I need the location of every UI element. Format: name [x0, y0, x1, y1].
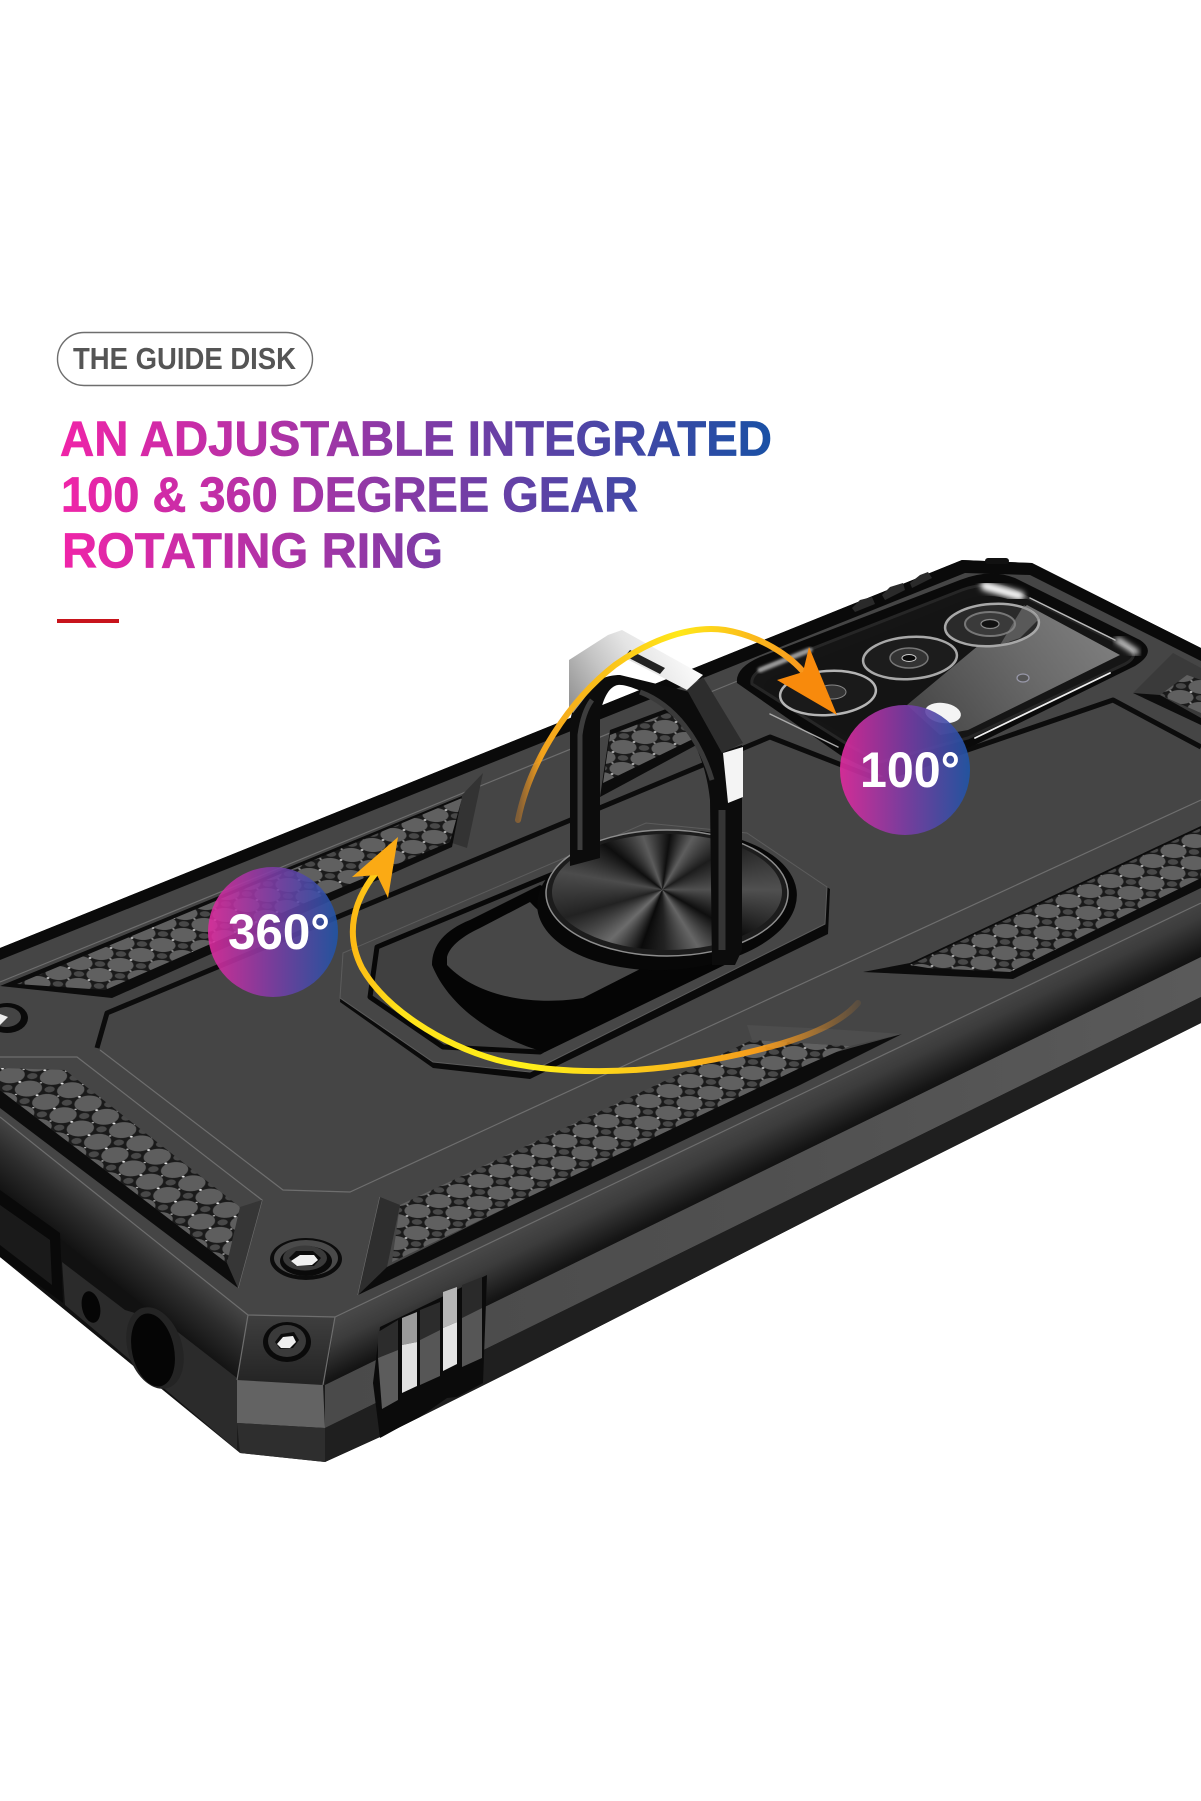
badge: the guide disk [58, 332, 312, 386]
back face [0, 573, 1201, 1317]
honeycomb panel: top left [0, 773, 483, 998]
side buttons [852, 558, 1009, 612]
arrow: 360 degree rotation [352, 837, 858, 1071]
rim glints [760, 586, 1136, 747]
top black edge [0, 560, 1201, 962]
honeycomb panel: bottom [358, 1025, 902, 1295]
octagon recess [370, 838, 790, 1052]
disk [552, 834, 782, 950]
side groove left [0, 1117, 248, 1380]
lens 3 [944, 601, 1040, 649]
lower corner [237, 1423, 325, 1462]
flash [924, 701, 962, 725]
grey side strip [325, 957, 1201, 1428]
badge: the guide disk: THE GUIDE DISK [73, 341, 297, 376]
corner bevel [237, 1315, 335, 1385]
corner plate [237, 1380, 325, 1428]
phone case [0, 558, 1201, 1462]
screw: lower corner [263, 1322, 311, 1362]
octagon plate [340, 823, 827, 1072]
honeycomb panel: top right [1133, 653, 1201, 725]
slider shadow body [432, 885, 735, 1052]
case silhouette [0, 560, 1201, 1462]
camera light glass [907, 605, 1120, 735]
side clip bars [373, 1275, 487, 1438]
screw: left edge [0, 1003, 28, 1033]
callout: 360 degrees: 360° [228, 904, 330, 960]
lower band [325, 997, 1201, 1462]
octagon plate shadow [340, 838, 830, 1079]
arrow: 100 degree rotation [518, 629, 837, 820]
camera black glass [764, 596, 1120, 752]
callout: 100 degrees [840, 705, 970, 835]
microphone dot [1017, 674, 1029, 682]
ring mount [340, 630, 830, 1079]
camera rim [752, 585, 1133, 762]
hinge slot [625, 650, 665, 674]
slider inner [447, 902, 658, 1001]
title [60, 412, 772, 578]
callout: 360 degrees [208, 867, 338, 997]
honeycomb panel: near ring [600, 700, 715, 797]
hinge side [687, 677, 743, 753]
camera outer frame [737, 573, 1148, 777]
honeycomb panel: right [863, 826, 1201, 979]
camera module [737, 573, 1148, 777]
light contour lines [0, 680, 1201, 1385]
end side with ports [0, 1190, 237, 1450]
ring handle [570, 675, 742, 965]
honeycomb panel: bottom left [0, 1068, 262, 1288]
hinge chrome bar [723, 747, 743, 803]
title: AN ADJUSTABLE INTEGRATED [60, 412, 772, 466]
recess black outline [97, 700, 1201, 1048]
screw: upper corner [270, 1238, 342, 1280]
disk outer ring [534, 823, 800, 977]
callout: 100 degrees: 100° [860, 742, 960, 798]
side groove right [325, 903, 1201, 1385]
title: 100 & 360 DEGREE GEAR [61, 468, 638, 522]
lens 2 [862, 634, 958, 682]
red accent rule [57, 619, 119, 623]
lens 1 [779, 668, 877, 718]
screws [0, 1003, 342, 1362]
title: ROTATING RING [62, 524, 443, 578]
ring hinge silver [569, 630, 703, 713]
